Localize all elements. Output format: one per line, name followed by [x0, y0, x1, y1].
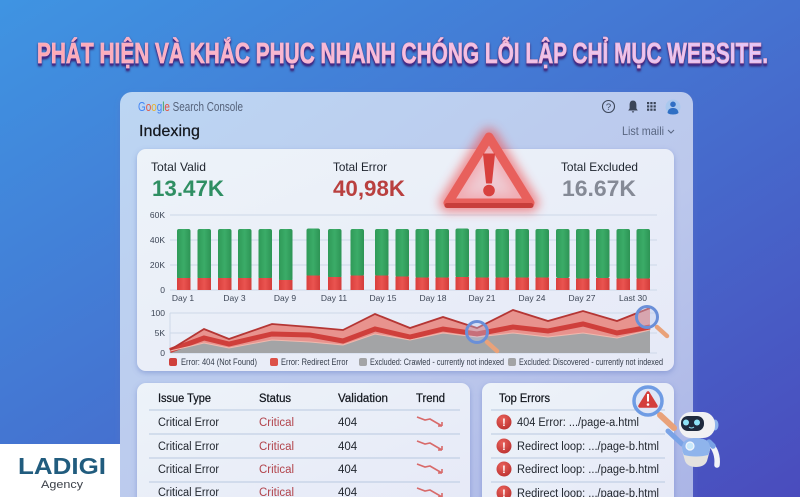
bar chart: daily totals: Day 11	[321, 293, 347, 303]
error row 3	[496, 462, 659, 476]
table header: Validation	[338, 393, 388, 405]
table row 2: 404	[338, 441, 358, 453]
table header: Issue Type	[158, 393, 211, 405]
bar chart: daily totals: 40K	[150, 235, 165, 245]
bar chart: daily totals: Day 24	[519, 293, 546, 303]
panel: search console window	[120, 92, 693, 497]
error row 3: Redirect loop: .../page-b.html	[517, 464, 659, 476]
panel: top errors	[482, 383, 674, 497]
area chart: errors and excluded	[151, 308, 657, 358]
heading: Indexing: Indexing	[139, 123, 200, 140]
error row 2	[496, 438, 659, 454]
robot right arm	[710, 444, 717, 465]
brand: Google Search Console: Google Search Console	[138, 100, 243, 114]
robot body	[682, 438, 710, 467]
metric: total error: 40,98K	[333, 176, 405, 201]
logo: LADIGI Agency: Agency	[41, 479, 84, 491]
metric: total excluded: Total Excluded	[561, 160, 638, 174]
icon: magnifier on chart, day 21	[466, 322, 497, 351]
metric: total valid: Total Valid	[151, 160, 206, 174]
error row 4	[496, 486, 659, 497]
table row 4	[158, 487, 442, 497]
icon: help: ?	[606, 102, 611, 113]
table header: Status	[259, 393, 291, 405]
bar chart: daily totals: 0	[160, 285, 165, 295]
metric: total error	[333, 160, 405, 201]
error row 1	[496, 414, 639, 430]
table row 1: 404	[338, 417, 358, 429]
icon: bell	[628, 100, 638, 113]
table row 3	[158, 464, 442, 476]
bar chart: daily totals: Day 1	[172, 293, 194, 303]
bar chart: daily totals: Day 21	[469, 293, 496, 303]
icon: apps grid	[647, 102, 656, 111]
error row 1: !	[502, 417, 506, 429]
bar chart: daily totals: Day 15	[370, 293, 397, 303]
table row 3: Critical Error	[158, 464, 219, 476]
table header: Trend	[416, 393, 445, 405]
metric: total error: Total Error	[333, 160, 387, 174]
legend: Excluded: Discovered - currently not indexed	[519, 357, 663, 367]
bar chart: daily totals: Last 30	[619, 293, 647, 303]
table row 2	[158, 441, 442, 453]
icon: magnifier with warning	[634, 387, 674, 428]
bar chart: daily totals: Day 18	[420, 293, 447, 303]
bar chart: daily totals: Day 9	[274, 293, 296, 303]
heading: top errors: Top Errors	[499, 393, 550, 405]
table row 1: Critical Error	[158, 417, 219, 429]
table row 2: Critical	[259, 441, 294, 453]
icon: avatar	[666, 100, 680, 114]
panel: metrics and charts	[137, 149, 674, 371]
table row 1: Critical	[259, 417, 294, 429]
legend: Excluded: Crawled - currently not indexed	[370, 357, 504, 367]
legend: Error: 404 (Not Found)	[181, 357, 257, 367]
error row 2: Redirect loop: .../page-b.html	[517, 441, 659, 453]
bar chart: daily totals: Day 27	[569, 293, 596, 303]
table header	[158, 393, 445, 405]
robot raised arm	[668, 431, 682, 444]
error row 2: !	[502, 441, 506, 453]
logo: LADIGI Agency	[0, 444, 120, 497]
icon: large warning triangle	[447, 137, 531, 206]
bar chart: daily totals: Day 3	[223, 293, 246, 303]
logo: LADIGI Agency: LADIGI	[18, 453, 106, 479]
table row 1	[158, 417, 442, 429]
area chart: errors and excluded: 5K	[155, 328, 165, 338]
icon: robot mascot	[668, 412, 718, 467]
panel: issue table	[137, 383, 470, 497]
table row 2: Critical Error	[158, 441, 219, 453]
bar chart: daily totals: 20K	[150, 260, 165, 270]
table row 3: 404	[338, 464, 358, 476]
bar chart: daily totals: 60K	[150, 210, 165, 220]
icon: help	[602, 100, 614, 113]
robot head	[712, 420, 718, 430]
metric: total excluded	[561, 160, 638, 201]
area chart: errors and excluded: 0	[160, 348, 165, 358]
area chart: errors and excluded: 100	[151, 308, 165, 318]
icon: magnifier on chart, last 30	[636, 306, 667, 336]
legend	[169, 357, 663, 367]
dropdown: List maili: List maili	[622, 124, 664, 138]
table row 3: Critical	[259, 464, 294, 476]
error row 3: !	[502, 464, 506, 476]
metric: total excluded: 16.67K	[562, 176, 636, 201]
metric: total valid	[151, 160, 224, 201]
metric: total valid: 13.47K	[152, 176, 224, 201]
legend: Error: Redirect Error	[281, 357, 348, 367]
bar chart: daily totals	[150, 210, 657, 303]
error row 1: 404 Error: .../page-a.html	[517, 417, 639, 429]
